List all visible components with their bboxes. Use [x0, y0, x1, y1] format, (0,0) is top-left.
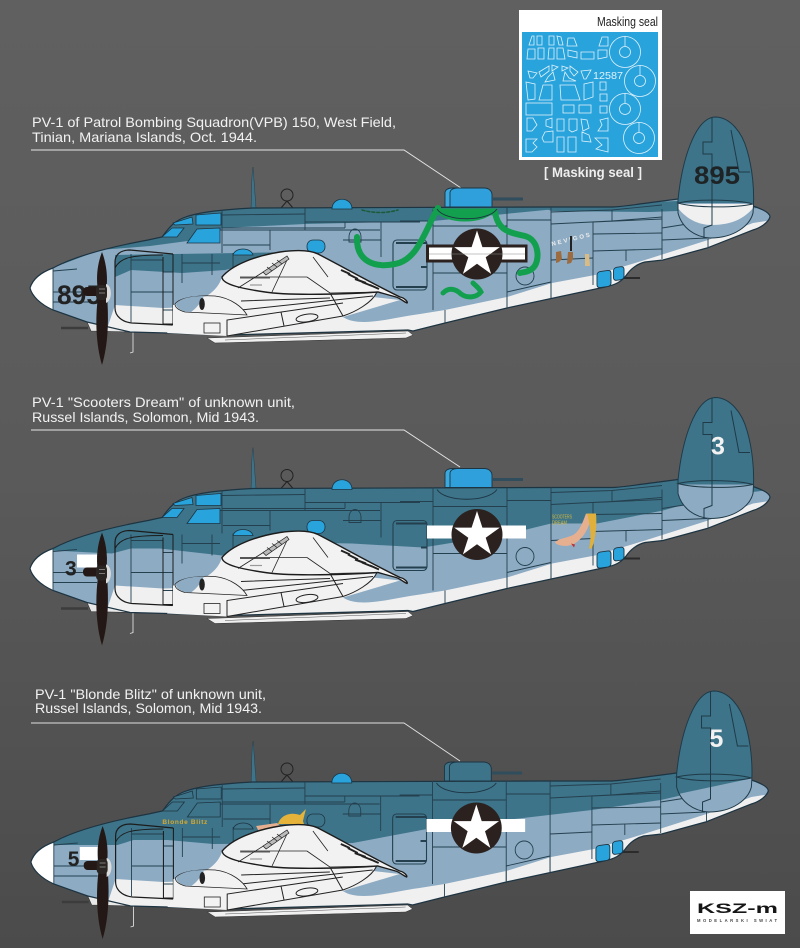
label: aircraft 3: PV-1 "Blonde Blitz" of unknown unit,	[35, 686, 266, 702]
fuselage camouflage	[30, 480, 770, 614]
wing	[167, 251, 407, 336]
fuselage outline	[30, 480, 770, 616]
panel lines	[53, 205, 708, 325]
rear windows	[597, 266, 624, 288]
nose marking 5	[68, 847, 98, 871]
antenna, guns and belly parts	[61, 448, 640, 634]
upper windows and dome	[233, 480, 352, 536]
masking seal caption: [ Masking seal ]	[544, 164, 642, 180]
label: aircraft 2: Russel Islands, Solomon, Mid 1943.	[32, 409, 259, 425]
nose art: NEVIGOS: NEVIGOS	[551, 232, 593, 248]
fuselage door	[393, 240, 427, 290]
fuselage door	[393, 814, 427, 864]
fuselage outline	[30, 199, 770, 335]
rear windows	[597, 547, 624, 568]
upper windows and dome	[233, 199, 352, 255]
fin and rudder	[676, 116, 754, 238]
aircraft 3: Blonde Blitz	[21, 684, 788, 939]
blue dome	[332, 773, 352, 783]
dorsal turret	[437, 468, 497, 499]
label: aircraft 2: PV-1 "Scooters Dream" of unknown unit,	[32, 394, 295, 410]
label: aircraft 1	[32, 114, 396, 145]
wing	[167, 825, 407, 910]
national insignia	[426, 228, 528, 280]
fuselage door	[393, 520, 427, 570]
masking seal title: Masking seal	[597, 14, 658, 29]
national insignia	[427, 802, 525, 854]
engine nacelle	[116, 824, 173, 899]
cockpit frames	[162, 787, 221, 817]
label: aircraft 2	[32, 394, 295, 425]
fin and rudder	[675, 690, 752, 812]
dorsal turret	[436, 762, 496, 793]
nose number: 895	[57, 280, 101, 310]
fin and rudder	[676, 397, 754, 519]
panel lines	[53, 486, 708, 606]
fuselage camouflage	[30, 200, 770, 334]
logo: KSZ-m	[690, 891, 785, 934]
panel: masking seal sheet	[519, 10, 662, 160]
tail number 3: 3	[711, 432, 725, 460]
cockpit glazing	[162, 213, 221, 243]
aircraft 1: VPB-150	[20, 110, 790, 365]
propeller	[83, 252, 111, 365]
tail number 5: 5	[710, 725, 723, 753]
nose art: Scooters Dream: DREAM	[552, 520, 567, 526]
masking seal blue sheet	[522, 32, 658, 157]
engine nacelle	[115, 530, 173, 606]
leader line: aircraft 2	[31, 430, 460, 467]
leader line: aircraft 1	[31, 150, 461, 188]
nose marking 3	[65, 554, 97, 580]
fuselage outline	[31, 773, 768, 909]
aircraft 2: Scooters Dream	[20, 390, 790, 646]
dorsal turret	[437, 188, 497, 219]
nose art: Scooters Dream	[552, 514, 596, 548]
nose marking 5: 5	[68, 848, 80, 871]
nose art: Scooters Dream: SCOOTERS	[552, 514, 572, 520]
rear windows	[596, 840, 623, 862]
label: aircraft 3: Russel Islands, Solomon, Mid 1943.	[35, 700, 262, 716]
label: aircraft 1: Tinian, Mariana Islands, Oct. 1944.	[32, 129, 257, 145]
tail number 895: 895	[694, 162, 740, 190]
upper windows	[233, 814, 325, 829]
propeller	[83, 532, 111, 646]
logo: KSZ-m: MODELARSKI SWIAT	[697, 918, 777, 923]
fuselage camouflage	[32, 774, 768, 908]
antenna, guns and belly parts	[61, 167, 640, 353]
label: aircraft 1: PV-1 of Patrol Bombing Squadron(VPB) 150, West Field,	[32, 114, 396, 130]
cockpit glazing	[162, 494, 221, 524]
nose art name: Blonde Blitz: Blonde Blitz	[162, 819, 207, 826]
logo: KSZ-m: KSZ-m	[697, 900, 778, 916]
propeller	[84, 826, 111, 939]
wing	[167, 531, 407, 616]
panel: masking seal sheet: 12587	[593, 70, 623, 82]
engine nacelle	[115, 250, 173, 325]
nose art: NEVIGOS	[551, 232, 593, 266]
mask cut-outs	[526, 36, 656, 154]
panel lines	[54, 779, 707, 899]
octopus artwork	[357, 208, 538, 297]
nose art figure	[256, 809, 306, 830]
leader line: aircraft 3	[31, 723, 460, 761]
antenna, guns and belly parts	[62, 741, 639, 927]
national insignia	[427, 509, 526, 560]
nose marking 3: 3	[65, 558, 77, 580]
label: aircraft 3	[35, 686, 266, 716]
